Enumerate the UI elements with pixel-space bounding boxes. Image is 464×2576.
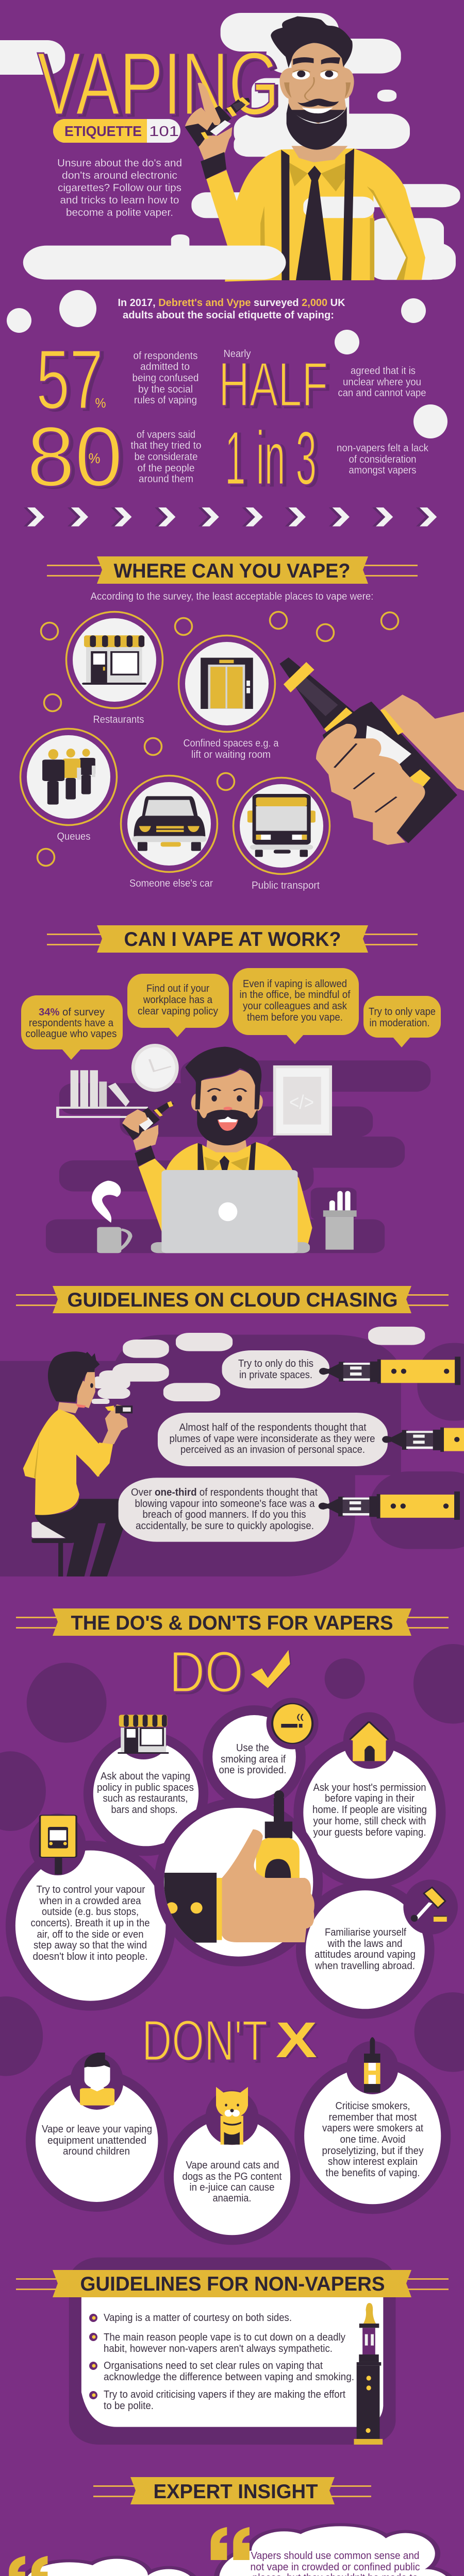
stat nearly half: agreed that it is — [351, 365, 416, 377]
bubble: laws abroad — [296, 1879, 458, 2019]
code symbol in frame: </> — [289, 1092, 314, 1113]
callout: one-third: blowing vapour into someone's face was a — [135, 1498, 315, 1510]
don't texts: Vape around cats and — [186, 2160, 279, 2171]
do texts — [31, 1742, 427, 1972]
do texts: outside (e.g. bus stops, — [42, 1906, 139, 1918]
intro text: Unsure about the do's and — [57, 158, 182, 169]
stat 1 in 3: non-vapers felt a lack — [337, 443, 429, 454]
stat 80%: % — [89, 450, 100, 466]
speech bubble office: your colleagues and ask — [243, 1001, 347, 1012]
intro text: don'ts around electronic — [62, 170, 177, 181]
quote text right: not vape in crowded or confined public — [251, 2562, 420, 2573]
speech bubble office: in the office, be mindful of — [239, 989, 351, 1001]
don't texts: around children — [63, 2146, 130, 2157]
stat 57%: being confused — [132, 372, 199, 384]
vapour clouds — [92, 1327, 425, 1404]
stat 80%: of the people — [137, 463, 195, 474]
stat 57%: by the social — [138, 384, 193, 395]
bubble: control vapour — [6, 1814, 175, 2011]
callout: private spaces — [222, 1350, 460, 1388]
don't texts: Criticise smokers, — [335, 2100, 410, 2112]
intro text — [57, 158, 182, 218]
quote text right: Vapers should use common sense and — [251, 2550, 420, 2562]
don't texts: proselytizing, but if they — [322, 2145, 424, 2157]
dark background bars — [46, 1060, 430, 1253]
survey intro: adults about the social etiquette of vaping: — [123, 310, 334, 321]
bubble: public spaces — [84, 1715, 208, 1856]
icon: vape pen — [354, 2303, 383, 2445]
do texts: bars and shops. — [111, 1804, 177, 1816]
DON'T heading: DON'T — [142, 2009, 268, 2073]
etiquette 101 pill — [53, 119, 180, 143]
callout: one-third — [119, 1478, 460, 1542]
heading banner: where can you vape — [47, 556, 418, 584]
speech bubble policy: workplace has a — [143, 994, 213, 1006]
icon: queue of people — [42, 749, 95, 805]
don't texts: remember that most — [329, 2112, 417, 2123]
office man illustration — [56, 1044, 357, 1253]
heading banner: expert insight — [93, 2477, 371, 2504]
dark blobs behind DON'T — [0, 1992, 464, 2076]
intro text: become a polite vaper. — [66, 207, 173, 218]
icon: bus — [247, 794, 316, 857]
don't texts: Vape or leave your vaping — [42, 2124, 152, 2135]
section: cloud chasing — [0, 1286, 464, 1577]
speech bubble office: them before you vape. — [247, 1012, 343, 1023]
don't texts: vapers were smokers at — [322, 2123, 423, 2134]
panel background — [69, 2258, 395, 2445]
do texts: one is provided. — [219, 1765, 287, 1776]
speech bubble 34%: respondents have a — [29, 1018, 114, 1029]
small rings — [37, 612, 398, 866]
callout: one-third: Over one-third of respondents thought that — [131, 1487, 318, 1498]
central thumbs up with bottle — [154, 1790, 323, 1967]
stat 80%: that they tried to — [131, 440, 201, 451]
don't texts: one time. Avoid — [340, 2134, 405, 2145]
heading banner: can I vape at work: CAN I VAPE AT WORK? — [124, 928, 341, 951]
circle frames — [21, 612, 330, 874]
labels: Queues — [57, 831, 91, 842]
dark background shapes — [0, 1335, 464, 1577]
stat 80%: of vapers said — [137, 429, 195, 440]
quote text right — [248, 2550, 423, 2576]
stat 1 in 3: amongst vapers — [349, 465, 417, 476]
callout: private spaces: Try to only do this — [238, 1358, 313, 1369]
heading banner: do's and don'ts — [16, 1608, 449, 1636]
DO heading: DO — [169, 1639, 243, 1704]
labels: Someone else's car — [129, 878, 213, 889]
do texts: when in a crowded area — [39, 1895, 141, 1907]
do texts: your home, still check with — [313, 1816, 426, 1827]
decorative bubbles — [7, 290, 448, 438]
guideline text: to be polite. — [104, 2400, 154, 2412]
don't texts: equipment unattended — [47, 2135, 146, 2146]
stat 1 in 3: of consideration — [349, 454, 417, 465]
speech bubble office — [233, 968, 359, 1044]
section: do's and don'ts — [0, 1608, 464, 2245]
do texts: air, off to the side or even — [37, 1929, 143, 1940]
labels: Restaurants — [93, 714, 144, 725]
DON'T heading: X — [276, 2012, 317, 2068]
speech bubble 34%: 34% of survey — [39, 1007, 105, 1018]
survey intro — [118, 297, 345, 321]
speech bubble policy: Find out if your — [146, 983, 209, 994]
do texts: when travelling abroad. — [314, 1960, 415, 1972]
stat nearly half: unclear where you — [343, 377, 421, 388]
do texts: Try to control your vapour — [36, 1884, 145, 1895]
stat 57%: 57 — [36, 332, 103, 427]
heading banner: non-vapers — [16, 2270, 449, 2297]
guideline text: acknowledge the difference between vaping and smoking. — [104, 2371, 354, 2383]
icon: lift — [201, 658, 253, 709]
stat 57%: of respondents — [133, 350, 198, 362]
labels — [57, 714, 320, 891]
heading banner: where can you vape: WHERE CAN YOU VAPE? — [113, 560, 351, 582]
stat nearly half: Nearly — [224, 348, 251, 360]
stat 57%: admitted to — [140, 361, 190, 372]
callout: private spaces: in private spaces. — [239, 1369, 312, 1381]
cloud overlapping character — [23, 246, 286, 280]
heading banner: non-vapers: GUIDELINES FOR NON-VAPERS — [80, 2273, 385, 2295]
don't texts: the benefits of vaping. — [326, 2167, 420, 2179]
guideline text: The main reason people vape is to cut down on a deadly — [104, 2332, 345, 2343]
callout: one-third: breach of good manners. If do you this — [142, 1509, 306, 1520]
guideline text: habit, however non-vapers aren't always sympathetic. — [104, 2343, 333, 2354]
survey sentence: According to the survey, the least acceptable places to vape were: — [91, 591, 373, 602]
guideline text: Try to avoid criticising vapers if they are making the effort — [104, 2389, 345, 2400]
do texts: such as restaurants, — [103, 1793, 188, 1804]
bubble: criticise smokers — [294, 2037, 451, 2214]
stat 1 in 3: 1 in 3 — [225, 416, 317, 501]
chevron divider — [24, 507, 437, 527]
do texts: policy in public spaces — [97, 1782, 194, 1793]
hero panel — [0, 13, 460, 282]
stat 80%: 80 — [27, 409, 123, 504]
heading banner: cloud chasing — [16, 1286, 449, 1313]
bubble: children — [26, 2053, 168, 2212]
guideline text — [104, 2312, 354, 2412]
callout: plumes of vape: plumes of vape were inconsiderate as they were — [169, 1433, 375, 1445]
section: where can you vape — [21, 556, 464, 891]
stat 57%: rules of vaping — [134, 395, 197, 406]
heading banner: do's and don'ts: THE DO'S & DON'TS FOR VAPERS — [71, 1612, 393, 1634]
bubble: host permission — [293, 1712, 445, 1889]
do texts: before vaping in their — [325, 1793, 415, 1804]
quote cloud left — [9, 2556, 211, 2576]
speech bubble moderation: in moderation. — [369, 1018, 430, 1029]
section: expert insight — [9, 2477, 453, 2576]
speech bubble policy — [127, 974, 229, 1037]
don't texts: in e-juice can cause — [190, 2182, 274, 2193]
callout: plumes of vape: perceived as an invasion of personal space. — [180, 1444, 365, 1455]
survey intro: In 2017, Debrett's and Vype surveyed 2,000 UK — [118, 297, 345, 309]
don't texts: show interest explain — [328, 2156, 418, 2167]
callout: one-third: accidentally, be sure to quickly apologise. — [136, 1520, 314, 1532]
callout: plumes of vape — [158, 1413, 464, 1466]
speech bubble moderation — [363, 996, 441, 1047]
don't texts — [42, 2100, 424, 2204]
stat 57% — [36, 332, 199, 427]
do texts: Ask about the vaping — [101, 1771, 190, 1782]
don't bubbles — [26, 2037, 451, 2245]
do texts: smoking area if — [221, 1754, 286, 1765]
stat 57%: % — [95, 395, 106, 411]
section: guidelines for non-vapers — [16, 2258, 449, 2445]
heading banner: cloud chasing: GUIDELINES ON CLOUD CHASING — [67, 1289, 398, 1311]
do bubbles — [6, 1698, 458, 2019]
quote cloud right — [211, 2526, 453, 2576]
dark blobs — [0, 1644, 464, 1831]
do texts: attitudes around vaping — [314, 1949, 416, 1960]
speech bubble 34%: colleague who vapes — [26, 1028, 117, 1040]
do texts: concerts). Breath it up in the — [31, 1918, 150, 1929]
heading banner: expert insight: EXPERT INSIGHT — [154, 2481, 318, 2503]
icon: hand holding vape — [279, 657, 464, 845]
stat 80%: around them — [139, 473, 193, 485]
do texts: home. If people are visiting — [312, 1804, 427, 1816]
labels: Confined spaces e.g. a — [184, 738, 279, 749]
smoke clouds behind character — [0, 13, 460, 280]
etiquette 101 pill: ETIQUETTE — [64, 123, 142, 139]
do texts: Use the — [236, 1742, 269, 1754]
survey stats panel — [7, 290, 448, 504]
speech bubble 34% — [21, 995, 123, 1060]
stat 80%: be considerate — [134, 451, 198, 463]
intro text: and tricks to learn how to — [60, 195, 179, 206]
stat 80% — [27, 409, 201, 504]
do texts: Ask your host's permission — [313, 1782, 426, 1793]
icon: restaurant — [82, 635, 146, 685]
do texts: Familiarise yourself — [325, 1927, 406, 1938]
do texts: with the laws and — [327, 1938, 402, 1950]
bullet markers — [89, 2314, 97, 2399]
stat nearly half: HALF — [219, 349, 328, 419]
labels: Public transport — [252, 880, 320, 891]
bubble: smoking area — [203, 1698, 319, 1808]
labels: lift or waiting room — [191, 749, 271, 760]
speech bubble office: Even if vaping is allowed — [243, 978, 347, 990]
title VAPING: VAPING — [37, 33, 279, 133]
do texts: your guests before vaping. — [313, 1827, 426, 1838]
etiquette 101 pill: 101 — [149, 123, 179, 139]
heading banner: can I vape at work — [47, 925, 418, 953]
section: can I vape at work — [21, 925, 441, 1253]
speech bubble moderation: Try to only vape — [369, 1006, 436, 1018]
guideline text: Vaping is a matter of courtesy on both sides. — [104, 2312, 292, 2324]
don't texts: anaemia. — [212, 2193, 252, 2204]
character with vape — [185, 16, 425, 282]
intro text: cigarettes? Follow our tips — [58, 182, 181, 194]
speech bubble policy: clear vaping policy — [138, 1006, 218, 1017]
do texts: doesn't blow it into people. — [33, 1951, 147, 1962]
stat nearly half: can and cannot vape — [338, 387, 426, 399]
do texts: step away so that the wind — [34, 1940, 147, 1951]
bubble: pets — [164, 2087, 300, 2245]
icon: car — [132, 796, 207, 851]
callout: plumes of vape: Almost half of the respondents thought that — [179, 1422, 367, 1433]
don't texts: dogs as the PG content — [183, 2171, 282, 2182]
person vaping — [23, 1351, 132, 1577]
guideline text: Organisations need to set clear rules on vaping that — [104, 2360, 323, 2371]
